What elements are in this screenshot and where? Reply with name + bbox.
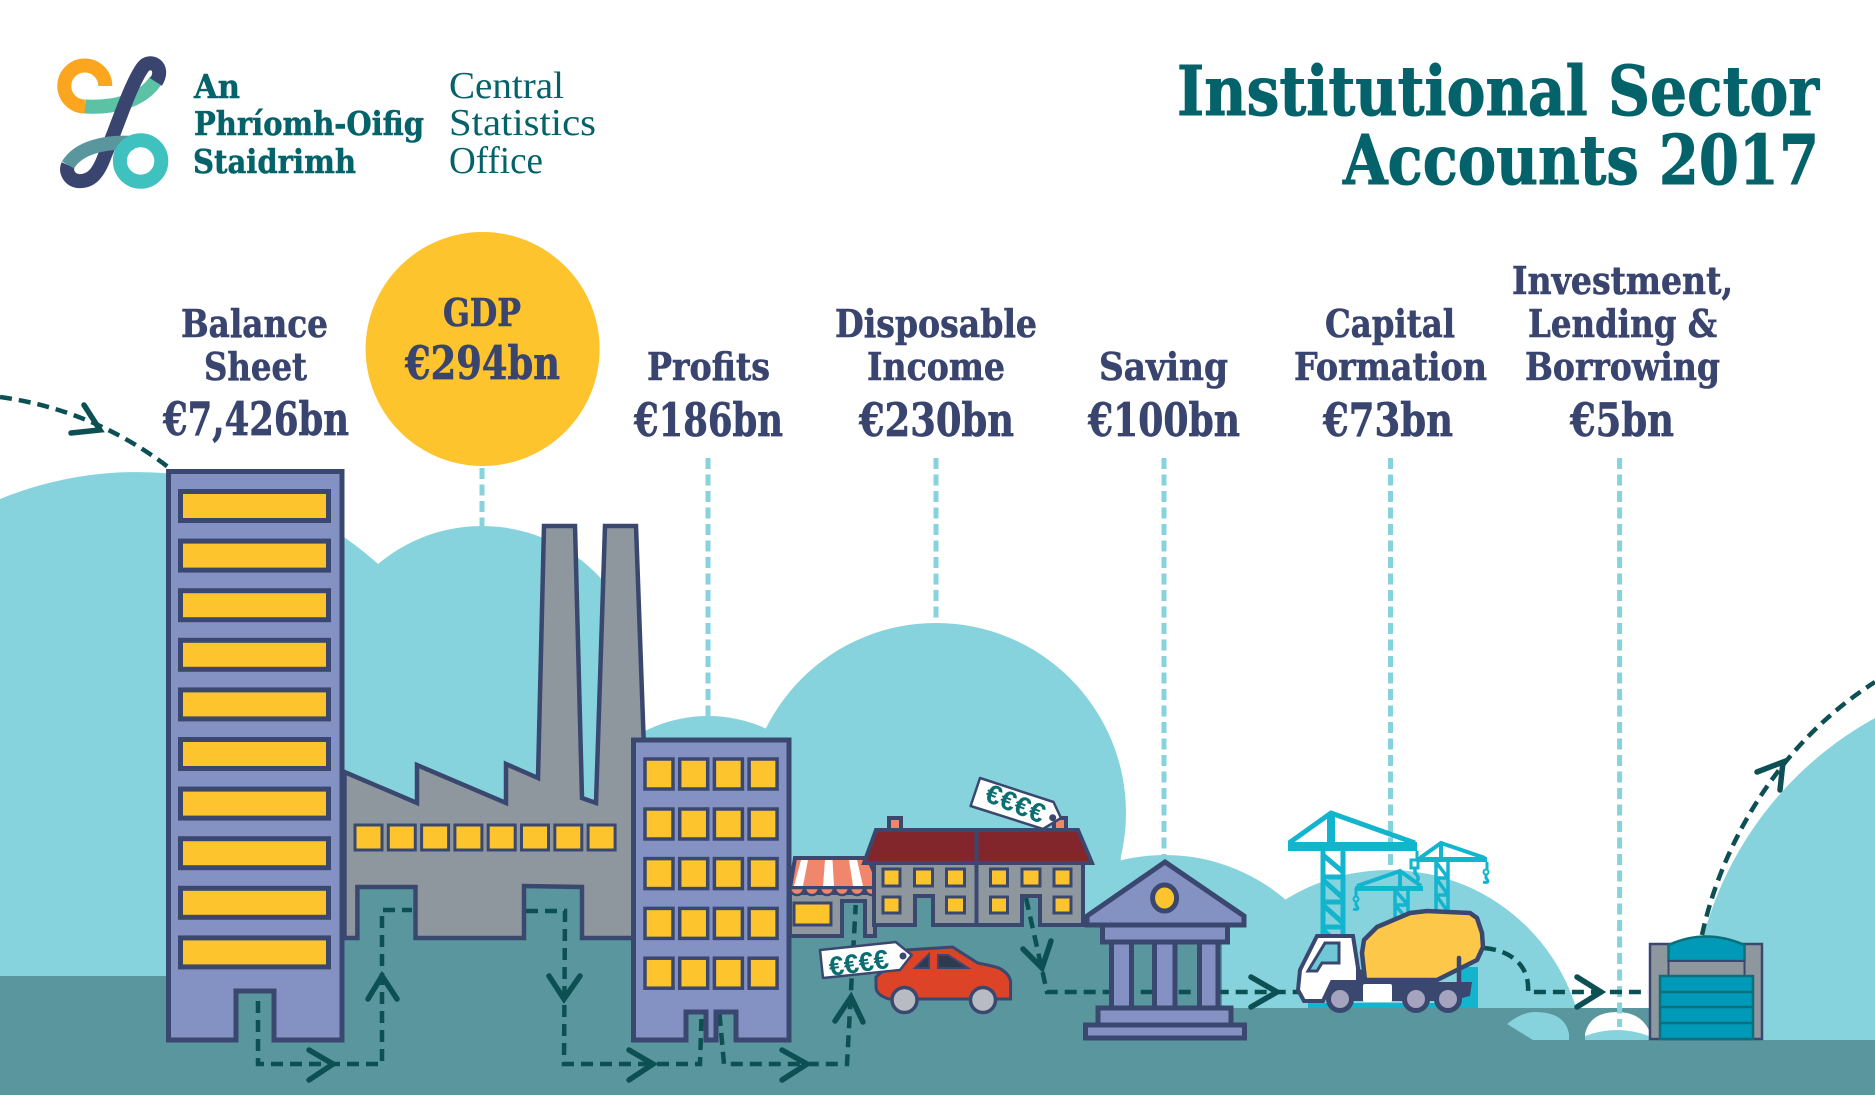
tall office tower bbox=[168, 472, 342, 1040]
GDP circle bbox=[366, 232, 600, 466]
price tag on car: €€€€ bbox=[827, 944, 891, 982]
label: Disposable Income: €230bn bbox=[858, 393, 1014, 447]
label: Capital Formation bbox=[1294, 301, 1487, 447]
small crane, left bbox=[1353, 871, 1423, 950]
logo text: English: Central bbox=[449, 65, 564, 107]
large crane bbox=[1288, 813, 1418, 1000]
logo text: Irish bbox=[193, 67, 424, 181]
title bbox=[1177, 52, 1820, 201]
GDP circle: €294bn bbox=[404, 336, 560, 390]
money flow paths bbox=[0, 397, 1875, 1064]
second office building bbox=[634, 740, 789, 1040]
logo text: Irish: Staidrimh bbox=[193, 142, 356, 181]
label: Investment, Lending & Borrowing: Borrowing bbox=[1525, 344, 1720, 389]
shop bbox=[790, 858, 881, 936]
bank bbox=[1086, 862, 1244, 1038]
label: Saving bbox=[1087, 344, 1240, 447]
label: Investment, Lending & Borrowing: Lending & bbox=[1528, 301, 1717, 346]
logo text: Irish: Phríomh-Oifig bbox=[194, 104, 424, 143]
logo text: Irish: An bbox=[193, 67, 240, 106]
storage building right bbox=[1650, 936, 1762, 1039]
label: Saving: Saving bbox=[1099, 344, 1228, 389]
car bbox=[876, 947, 1011, 1012]
label: Profits: €186bn bbox=[633, 393, 783, 447]
label: Investment, Lending & Borrowing: Investment, bbox=[1512, 258, 1733, 303]
factory bbox=[344, 526, 644, 938]
background hills bbox=[0, 472, 1875, 1066]
price tag on houses: €€€€ bbox=[981, 778, 1050, 829]
label: Balance Sheet: Sheet bbox=[204, 344, 307, 389]
construction base bbox=[1308, 967, 1478, 1008]
construction cranes bbox=[1288, 813, 1488, 1008]
label: Disposable Income: Income bbox=[867, 344, 1005, 389]
label: Disposable Income bbox=[835, 301, 1037, 447]
terraced houses bbox=[864, 818, 1092, 925]
flow arrowheads bbox=[71, 405, 1783, 1080]
small crane, right bbox=[1418, 843, 1488, 950]
logo text: English: Statistics bbox=[449, 102, 596, 144]
label: Balance Sheet bbox=[162, 301, 349, 446]
label: Capital Formation: Capital bbox=[1325, 301, 1455, 346]
GDP circle: GDP bbox=[443, 290, 521, 335]
ground bbox=[0, 885, 1875, 1095]
label: Investment, Lending & Borrowing: €5bn bbox=[1569, 393, 1674, 447]
bridge arches bbox=[1507, 1012, 1649, 1040]
label: Balance Sheet: Balance bbox=[181, 301, 328, 346]
label: Disposable Income: Disposable bbox=[835, 301, 1037, 346]
logo text: English: Office bbox=[449, 140, 543, 182]
logo mark bbox=[64, 63, 161, 182]
logo text: English bbox=[449, 65, 596, 182]
label: Profits: Profits bbox=[647, 344, 770, 389]
label: Investment, Lending & Borrowing bbox=[1512, 258, 1733, 447]
label: Profits bbox=[633, 344, 783, 447]
cement mixer truck bbox=[1298, 911, 1483, 1010]
label: Balance Sheet: €7,426bn bbox=[162, 392, 349, 446]
price tag on car bbox=[820, 942, 912, 982]
label: Saving: €100bn bbox=[1087, 393, 1240, 447]
label: Capital Formation: Formation bbox=[1294, 344, 1487, 389]
label: Capital Formation: €73bn bbox=[1322, 393, 1453, 447]
dashed guide lines bbox=[482, 458, 1620, 1027]
